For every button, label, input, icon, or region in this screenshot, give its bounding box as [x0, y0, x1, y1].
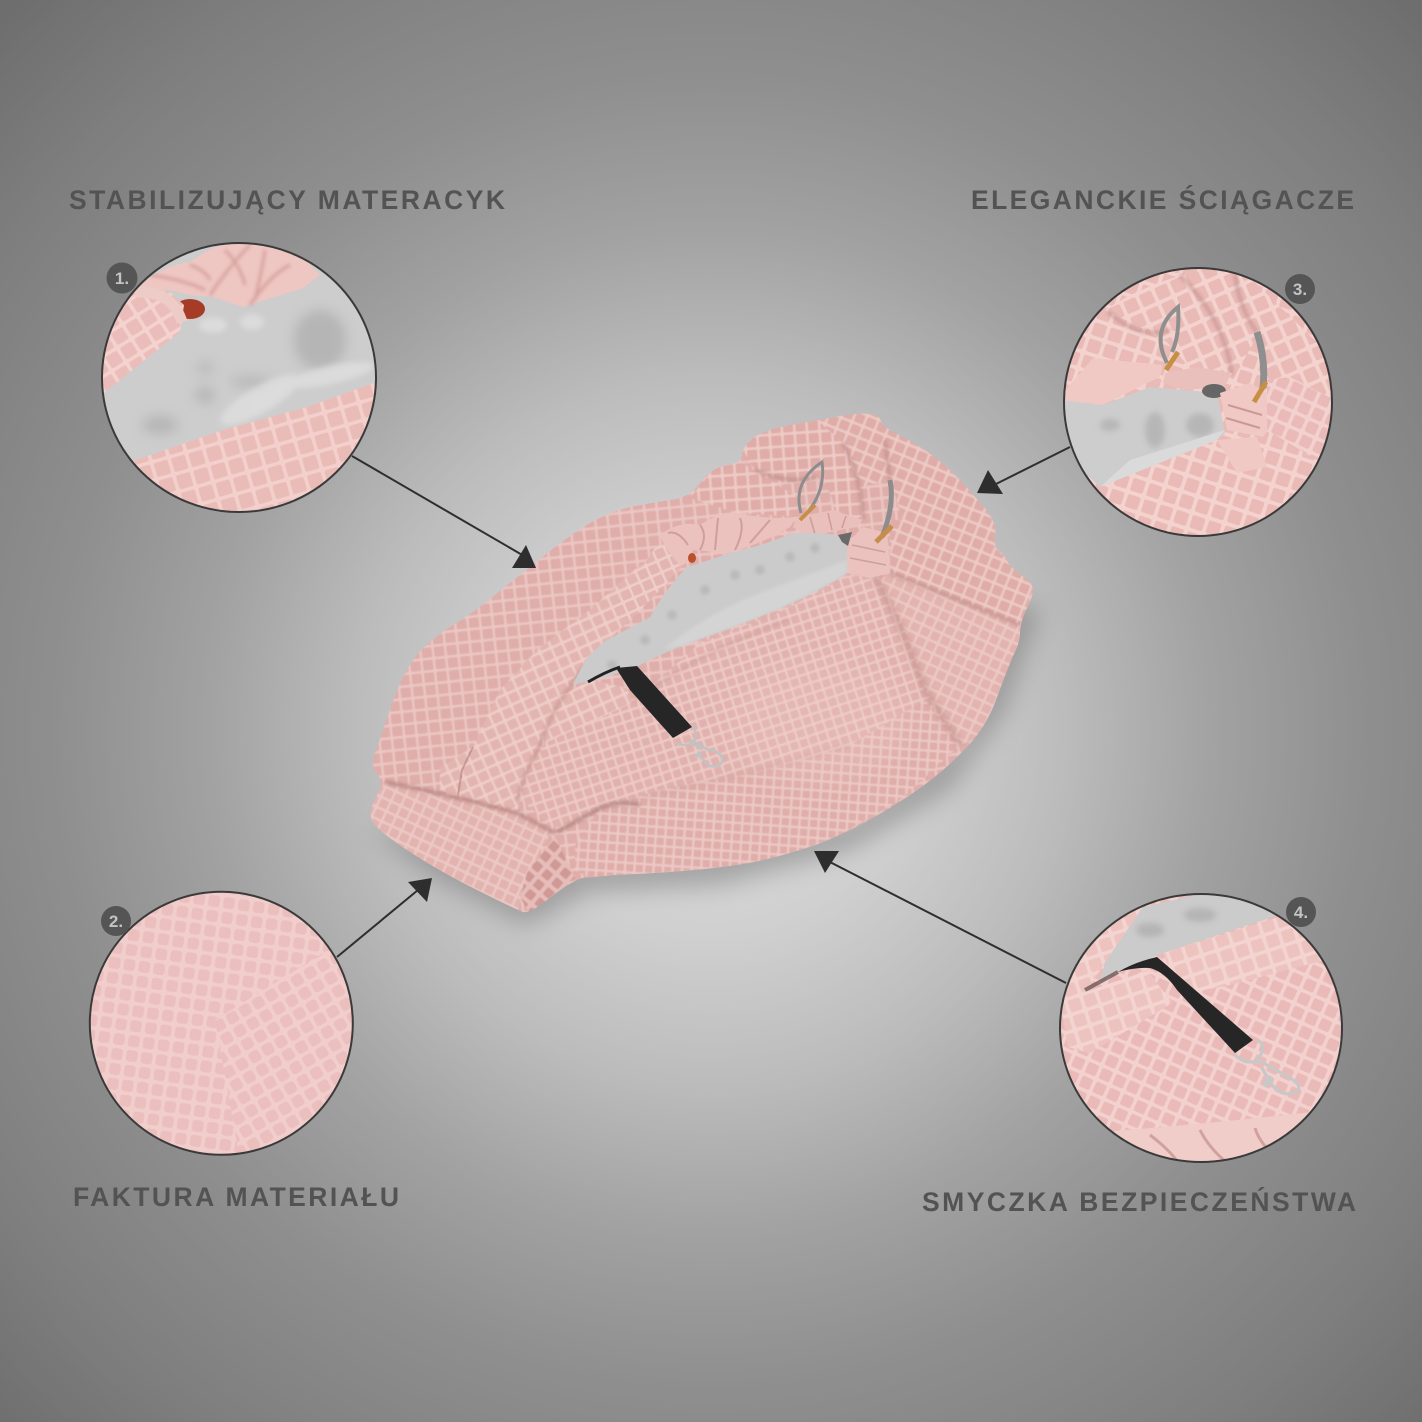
bottom fabric band — [133, 382, 375, 511]
ruffled drawstring edge, left — [660, 513, 797, 565]
heading: safety leash: SMYCZKA BEZPIECZEŃSTWA — [922, 1187, 1356, 1217]
dark gap — [1202, 384, 1226, 398]
gold clips — [1166, 352, 1266, 402]
badge 3: 3. — [1293, 280, 1307, 299]
arrow 3 to drawstring — [977, 447, 1070, 494]
badge 3 — [1285, 274, 1315, 304]
carabiner clip — [675, 725, 723, 766]
left fold — [103, 292, 184, 392]
arrow 2 to fabric — [337, 878, 432, 957]
cuff panel — [890, 520, 1035, 625]
lump under leash — [538, 680, 632, 742]
badge 4: 4. — [1294, 903, 1308, 922]
fabric lower right — [215, 951, 352, 1152]
heading: stabilizing mattress: STABILIZUJĄCY MATERACYK — [69, 185, 505, 215]
bottom ruffles — [1100, 1110, 1330, 1170]
ruffled center edge — [793, 510, 863, 537]
lower zone of front — [575, 700, 960, 878]
carrier body — [360, 405, 1050, 925]
circle 4: leash detail — [1055, 890, 1347, 1170]
lobe: top puff — [742, 420, 863, 527]
dark gap shade — [1085, 972, 1118, 990]
grey mattress — [1100, 890, 1285, 980]
lighter mattress fold — [665, 560, 847, 648]
circle outline — [1064, 268, 1332, 536]
ruffle lower — [1217, 437, 1267, 473]
badge 1 — [106, 262, 138, 294]
fabric swatch — [90, 892, 329, 1154]
circle 1: mattress detail — [95, 240, 382, 520]
black leash strap — [616, 666, 692, 738]
badge 1: 1. — [115, 269, 129, 288]
badge 2: 2. — [109, 912, 123, 931]
circle outline — [90, 892, 353, 1155]
thin strap — [588, 667, 620, 682]
badge 4 — [1286, 897, 1316, 927]
ruffle creases — [150, 245, 290, 305]
cuff panel — [1267, 377, 1335, 460]
light mattress fold — [1100, 430, 1225, 487]
grey mattress — [104, 245, 375, 461]
front panel — [518, 576, 955, 830]
top ruffle — [130, 240, 320, 307]
gold clip 2 — [876, 526, 892, 542]
right side panel — [880, 573, 1020, 745]
orange glimpse — [688, 553, 696, 563]
circle 2: fabric texture detail — [88, 890, 360, 1160]
red lining — [180, 299, 205, 319]
tunnel opening — [520, 836, 575, 914]
grey elastic loop 1 — [799, 462, 823, 513]
carabiner — [1234, 1040, 1299, 1094]
arrow 1 to mattress — [352, 456, 536, 568]
rolled edge — [1068, 970, 1172, 1053]
circle outline — [102, 243, 376, 512]
dark gap — [838, 532, 852, 546]
grey mattress — [1060, 387, 1225, 487]
shadow under product — [372, 600, 1040, 925]
ruffle left — [1063, 358, 1163, 405]
badge 2 — [101, 906, 131, 936]
flap tip — [612, 545, 680, 625]
arrow 4 to leash — [814, 851, 1066, 983]
pink fabric — [1061, 895, 1341, 1131]
lobe: top right band — [817, 408, 1000, 548]
upper panel — [1163, 915, 1325, 995]
ruffle center — [1163, 367, 1233, 390]
grey minky mattress — [573, 533, 847, 685]
heading: elegant drawstrings: ELEGANCKIE ŚCIĄGACZE — [971, 185, 1354, 215]
product: pink waffle pet carrier — [360, 405, 1050, 925]
fabric folds — [1108, 275, 1257, 375]
fold shadows — [385, 782, 555, 833]
lobe: left of loop — [690, 463, 798, 517]
left strip fabric — [1060, 907, 1143, 1047]
heading: fabric texture: FAKTURA MATERIAŁU — [73, 1182, 399, 1212]
black strap — [1118, 957, 1253, 1053]
elastic loops — [1161, 307, 1178, 363]
ruffled right edge — [847, 527, 890, 578]
circle 3: drawstring detail — [1060, 265, 1335, 540]
pink fabric — [1060, 265, 1335, 540]
mattress dimples — [607, 543, 820, 670]
bottom roll — [371, 782, 550, 910]
flap band (lighter) — [440, 563, 685, 812]
circle outline — [1060, 894, 1342, 1162]
grey elastic loop 2 — [882, 480, 891, 537]
ruffle right — [1220, 383, 1270, 437]
gold clip 1 — [800, 505, 815, 520]
upper fabric — [1105, 268, 1335, 400]
